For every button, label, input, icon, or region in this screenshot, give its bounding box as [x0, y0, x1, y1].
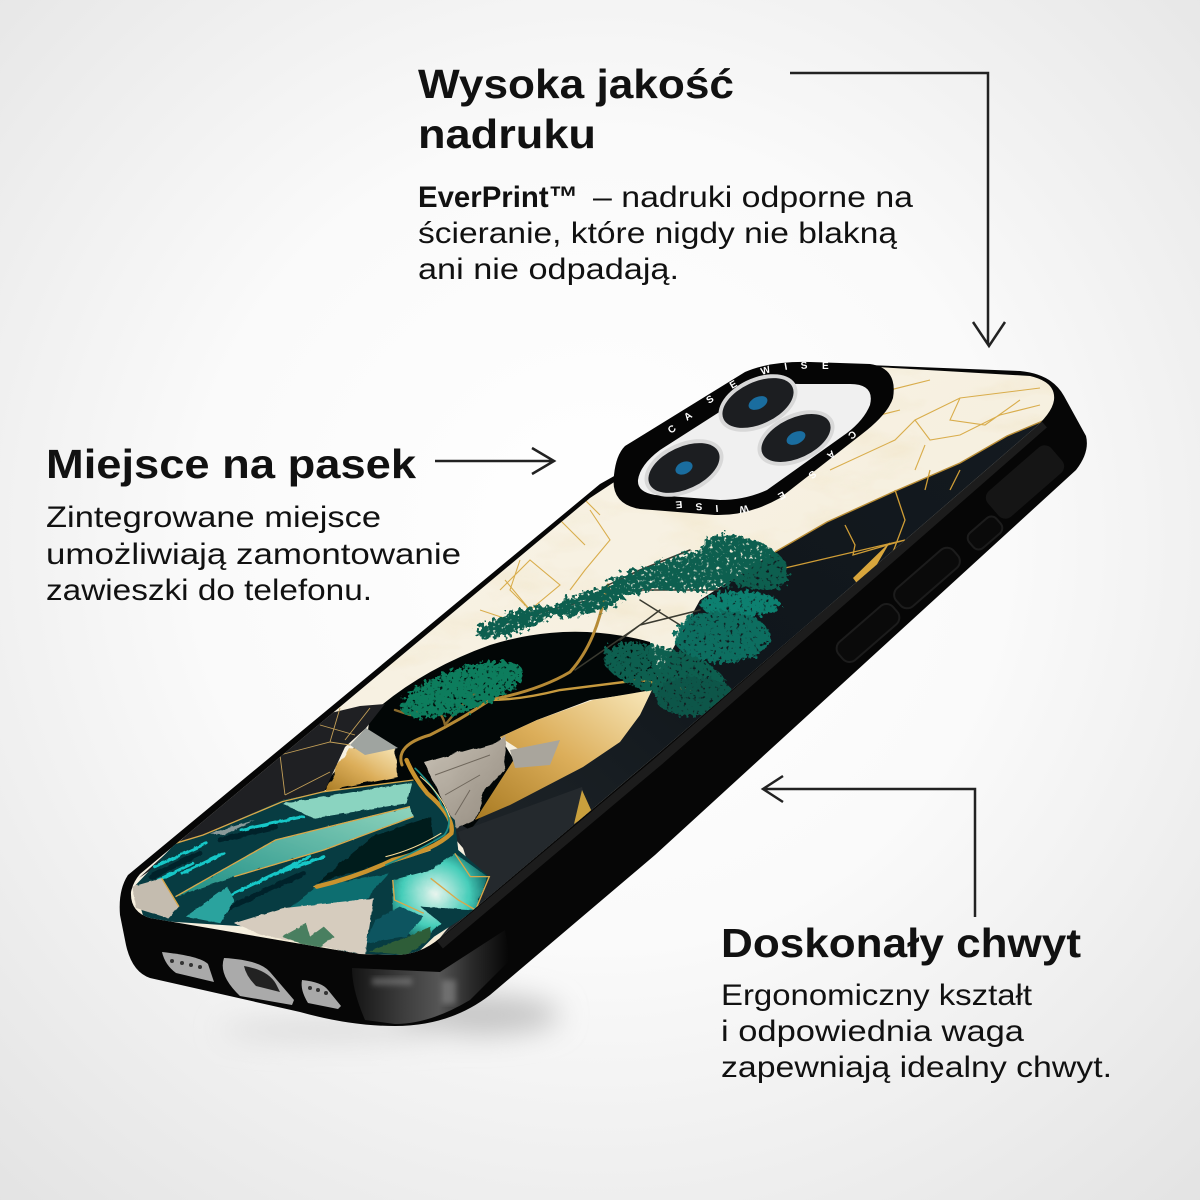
volume and power buttons — [833, 514, 1005, 666]
marble base — [130, 367, 1054, 955]
brand ring: S — [695, 500, 703, 512]
camera glass — [638, 384, 871, 500]
moon dark disc — [320, 632, 660, 830]
silver leaf — [510, 740, 560, 768]
heading: Doskonały chwyt — [721, 920, 1081, 966]
brand ring: E — [775, 488, 787, 501]
brand ring: I — [715, 502, 719, 513]
gold river — [317, 760, 452, 887]
brand ring: S — [806, 468, 818, 481]
phone shadow — [220, 995, 560, 1040]
gold outlines — [162, 780, 489, 913]
heading: Wysoka jakość — [418, 61, 734, 107]
brand ring — [666, 360, 858, 515]
dark left mountain — [139, 704, 385, 878]
callout: strap slot — [46, 441, 461, 607]
phone case — [120, 363, 1087, 1026]
arrow: grip — [763, 776, 975, 917]
brand ring: W — [738, 502, 749, 515]
arrow: strap slot — [435, 448, 554, 474]
brand ring: S — [800, 360, 808, 372]
bottom corner sleeve — [352, 930, 510, 1024]
foliage bottom — [369, 927, 431, 955]
charging port — [162, 952, 341, 1009]
brand ring: A — [824, 448, 837, 461]
body: Ergonomiczny kształt — [721, 979, 1033, 1012]
body: EverPrint™ — [418, 181, 578, 214]
moon gold — [475, 690, 652, 820]
brand ring: I — [784, 362, 788, 373]
rocks — [234, 898, 374, 955]
callout: strap slot: zawieszki do telefonu. — [46, 574, 372, 607]
teal waterfall — [132, 760, 489, 957]
brand ring: S — [705, 393, 716, 406]
callout: print quality: ani nie odpadają. — [418, 253, 679, 286]
callout: grip — [721, 920, 1112, 1084]
callout: print quality: nadruku — [418, 111, 596, 157]
heading: Miejsce na pasek — [46, 441, 416, 487]
callout: print quality — [418, 61, 913, 286]
brand ring: C — [666, 423, 679, 436]
brand ring: W — [760, 364, 772, 378]
body: Zintegrowane miejsce — [46, 501, 381, 534]
dark cave — [317, 817, 434, 883]
brand ring: E — [675, 498, 683, 510]
callout: grip: i odpowiednia waga — [721, 1015, 1024, 1048]
brand ring: C — [845, 428, 858, 441]
side button — [982, 442, 1068, 522]
callout: print quality: – nadruki odporne na — [593, 181, 913, 214]
callout: grip: zapewniają idealny chwyt. — [721, 1051, 1112, 1084]
gold rock left — [324, 747, 398, 792]
turquoise speckles — [186, 887, 234, 923]
case body — [120, 363, 1087, 1026]
gold cracks — [786, 470, 960, 568]
brand ring: E — [822, 361, 829, 372]
brand ring: A — [682, 410, 695, 423]
camera island — [614, 360, 894, 515]
rock centre — [424, 738, 508, 830]
pale bands — [282, 783, 412, 818]
foliage — [395, 524, 796, 730]
lens left — [635, 428, 733, 508]
arrow: print quality — [790, 73, 1005, 346]
lens top — [709, 363, 807, 443]
dark right lower mountain — [463, 788, 590, 899]
branches — [395, 550, 720, 765]
glowing pool — [393, 853, 488, 943]
marble veins — [480, 380, 1040, 620]
big tree and small tree — [395, 524, 796, 765]
case artwork — [130, 362, 1054, 955]
brand ring: E — [728, 379, 740, 392]
dark mountain right — [440, 422, 1042, 938]
side band highlight — [440, 424, 1044, 945]
cyan streaks — [155, 817, 324, 900]
lens right — [749, 399, 843, 477]
island frame — [614, 362, 894, 515]
callout: strap slot: umożliwiają zamontowanie — [46, 538, 461, 571]
callout: print quality: ścieranie, które nigdy nie blakną — [418, 217, 897, 250]
